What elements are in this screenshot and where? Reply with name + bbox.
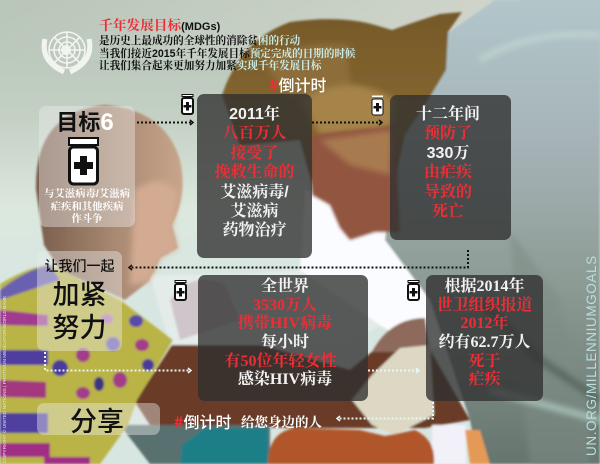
call to action text: 让我们一起 (44, 256, 114, 276)
panel: call to action: 努力 (52, 306, 106, 345)
HIV text: 每小时 (261, 334, 309, 351)
HIV text: 3530万人 (253, 297, 317, 314)
icon: bottle 4 (407, 280, 420, 301)
lower floor (120, 425, 270, 464)
teal cloth (180, 428, 268, 464)
icon: medicine bottle (68, 137, 99, 186)
white under (432, 425, 466, 464)
malaria prevention text: 预防了 (424, 125, 472, 142)
arm (135, 345, 470, 428)
treatment text: 药物治疗 (222, 222, 286, 239)
malaria deaths text: 根据2014年 (444, 278, 524, 295)
malaria prevention text: 导致的 (424, 184, 472, 201)
icon: bottle 2 (372, 96, 384, 116)
malaria deaths text: 死于 (468, 353, 500, 370)
header text block (99, 18, 356, 72)
malaria deaths text: 2012年 (460, 315, 508, 332)
panel: goal 6 (39, 106, 135, 227)
panel: call to action (37, 251, 122, 351)
yellow shirt with stripes (0, 265, 173, 464)
malaria prevention text: 由疟疾 (424, 164, 472, 181)
polka dots (52, 360, 68, 376)
nurse hair (222, 12, 462, 195)
malaria prevention text: 死亡 (432, 203, 464, 220)
malaria prevention text (416, 105, 480, 220)
treatment text: 接受了 (230, 145, 278, 162)
HIV text: 携带HIV病毒 (238, 315, 332, 332)
goal description (44, 188, 130, 225)
treatment text: 艾滋病毒/ (220, 184, 289, 201)
malaria deaths text: 世卫组织报道 (436, 297, 532, 314)
panel: worldwide HIV (198, 275, 368, 401)
un emblem (42, 31, 92, 74)
malaria prevention text: 330万 (427, 145, 469, 162)
title: 千年发展目标(MDGs) (99, 18, 220, 33)
treatment text: 八百万人 (222, 125, 286, 142)
hashtag countdown bottom: #倒计时 (174, 409, 231, 433)
hashtag countdown top: #倒计时 (269, 72, 326, 96)
icon: bottle 1 (181, 94, 194, 115)
panel: 2011 treatment (197, 94, 312, 258)
HIV text: 感染HIV病毒 (238, 371, 332, 388)
header text block: 让我们集合起来更加努力加紧实现千年发展目标 (99, 60, 321, 72)
orange bag (268, 428, 434, 464)
goal description: 作斗争 (71, 214, 103, 225)
malaria deaths text: 约有62.7万人 (438, 334, 530, 351)
share text: 分享 (70, 400, 124, 439)
icon: bottle 3 (174, 280, 187, 301)
copyright vertical: COPYRIGHT © UNITED NATIONS | PHOTO/UN MEDICATOR/WORLD BANK (3, 296, 8, 463)
HIV text: 全世界 (261, 278, 309, 295)
HIV text (224, 277, 336, 388)
goal description: 疟疾和其他疾病 (51, 202, 123, 212)
coat (385, 0, 600, 464)
header text block: 是历史上最成功的全球性的消除贫困的行动 (99, 35, 300, 47)
panel: twelve years (390, 95, 511, 240)
child head (36, 105, 183, 300)
malaria deaths text (436, 277, 532, 388)
white backdrop (300, 190, 480, 350)
header text block: 当我们接近2015年千年发展目标预定完成的日期的时候 (99, 48, 356, 60)
panel: call to action: 加紧 (52, 273, 106, 312)
treatment text: 艾滋病 (230, 203, 278, 220)
share caption: 给您身边的人 (241, 415, 322, 430)
goal heading: 目标6 (56, 105, 114, 137)
malaria prevention text: 十二年间 (416, 106, 480, 123)
panel: WHO 2014 report (426, 275, 543, 401)
nurse face (312, 125, 400, 240)
HIV text: 有50位年轻女性 (224, 353, 336, 370)
treatment text: 挽救生命的 (214, 164, 294, 181)
goal description: 与艾滋病毒/艾滋病 (44, 189, 130, 200)
website url vertical: UN.ORG/MILLENNIUMGOALS (584, 255, 599, 456)
panel: share (37, 403, 160, 435)
treatment text: 2011年 (229, 106, 280, 123)
nurse hand (372, 318, 430, 352)
glove (352, 345, 434, 435)
treatment text (214, 105, 294, 239)
malaria deaths text: 疟疾 (468, 371, 500, 388)
